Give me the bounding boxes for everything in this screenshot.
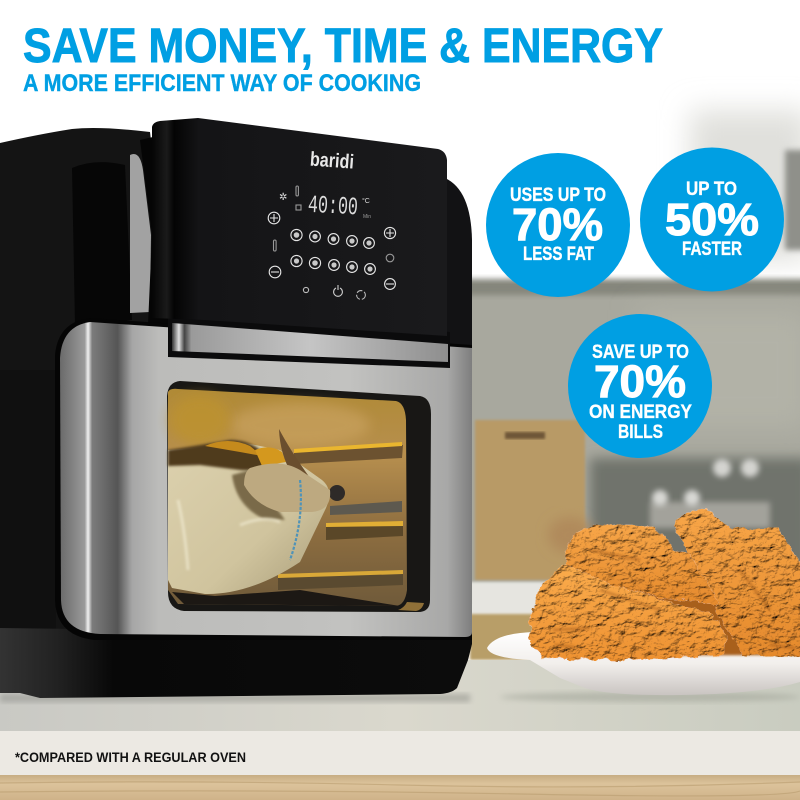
badge: faster: FASTER	[682, 238, 742, 260]
badge: faster: 50%	[665, 194, 759, 245]
plate	[487, 632, 800, 695]
chicken piece: leg	[673, 508, 800, 656]
badge: less fat: LESS FAT	[523, 243, 594, 265]
timer display: Min	[363, 214, 371, 220]
fryer base	[0, 628, 472, 698]
badge: energy bills: 70%	[594, 356, 686, 407]
footnote: *COMPARED WITH A REGULAR OVEN	[15, 750, 246, 765]
badge: energy bills: ON ENERGY	[589, 401, 692, 423]
badge: energy bills: BILLS	[618, 421, 663, 443]
chicken piece: back	[565, 524, 722, 604]
badge: less fat: 70%	[512, 199, 603, 250]
timer display	[279, 191, 371, 222]
brand logo: baridi	[309, 149, 355, 174]
badge: energy bills: SAVE UP TO	[592, 341, 689, 363]
chicken shadow	[545, 565, 800, 656]
control panel	[152, 118, 447, 336]
oven racks	[278, 442, 403, 590]
badge: faster: UP TO	[686, 178, 737, 200]
badge: less fat	[486, 153, 630, 297]
timer display: 40:00	[307, 191, 359, 222]
stainless front	[55, 318, 472, 640]
timer display: °C	[362, 197, 370, 205]
air fryer	[0, 118, 472, 698]
lower left housing	[0, 370, 56, 630]
chicken creases	[553, 550, 795, 648]
oven window	[167, 381, 431, 612]
fried chicken on plate	[487, 508, 800, 695]
chicken piece: front	[529, 564, 728, 660]
badge: faster	[640, 148, 784, 292]
badge: energy bills	[568, 314, 712, 458]
handle band	[168, 314, 450, 368]
touch buttons	[268, 186, 396, 299]
timer display: ✲	[279, 192, 287, 203]
countertop	[0, 660, 800, 800]
title: SAVE MONEY, TIME & ENERGY	[23, 20, 663, 73]
fryer rear body	[0, 128, 175, 650]
rotisserie chicken	[168, 429, 400, 606]
subtitle: A MORE EFFICIENT WAY OF COOKING	[23, 70, 421, 97]
badge: less fat: USES UP TO	[510, 184, 606, 206]
